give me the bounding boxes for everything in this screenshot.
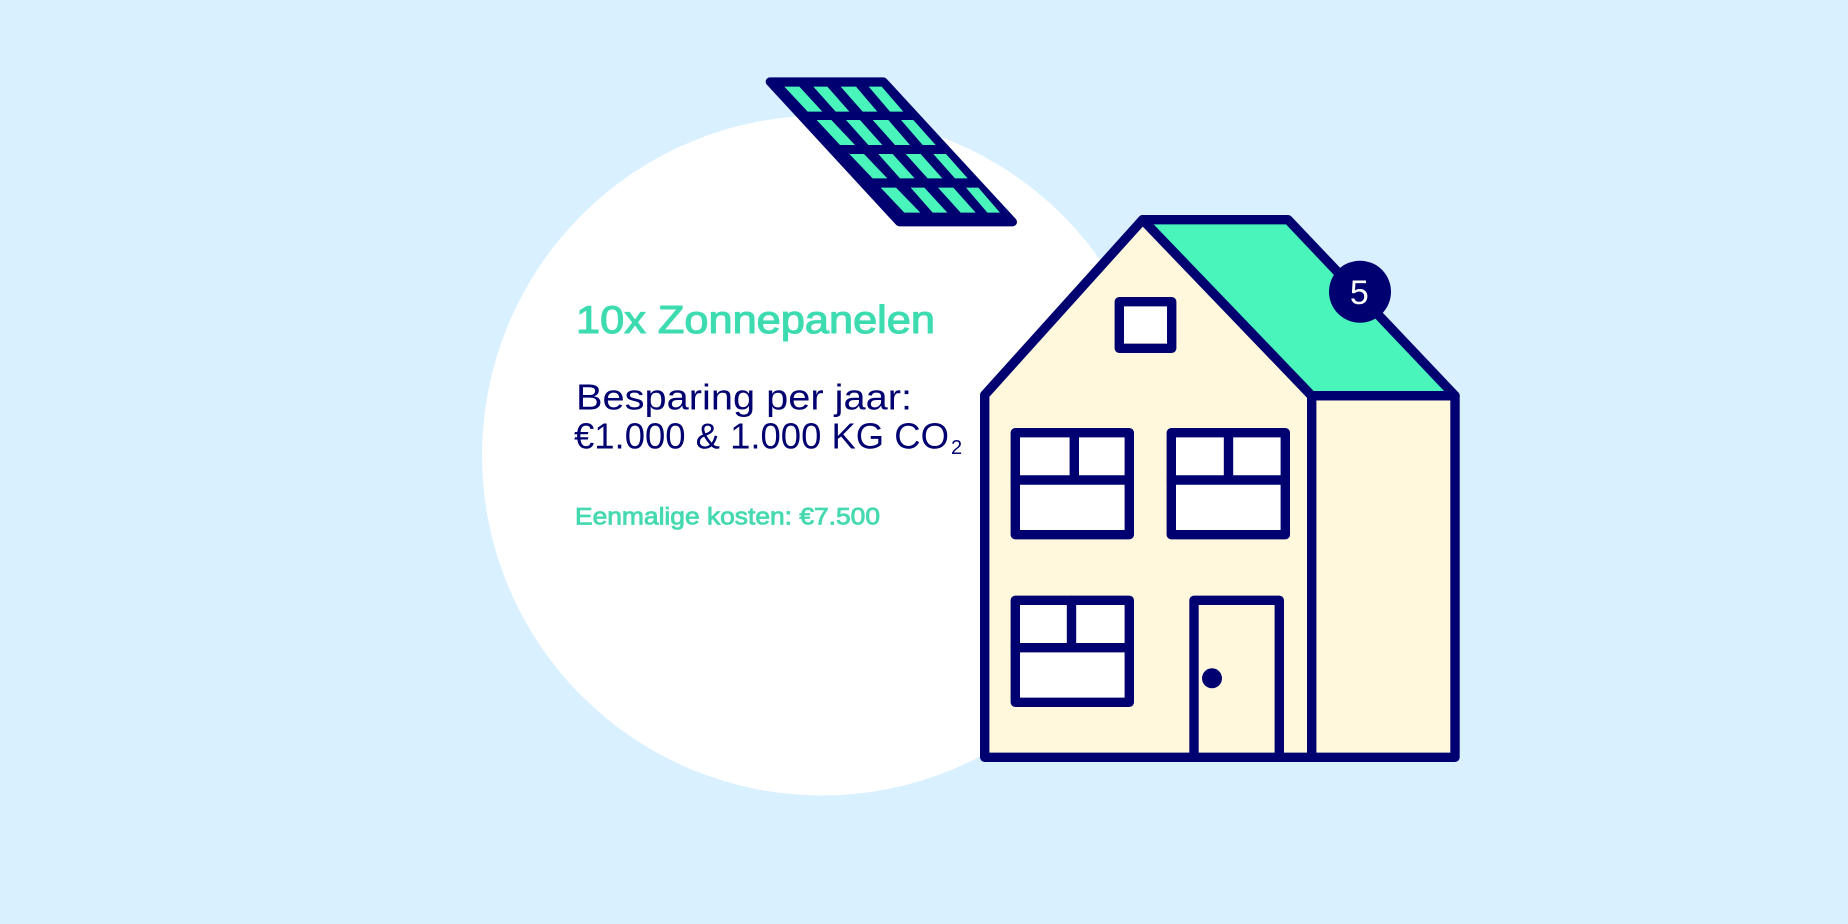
house main wall: [985, 220, 1312, 757]
solar panel frame: [770, 82, 1013, 222]
one-time cost: Eenmalige kosten: €7.500: [575, 503, 880, 530]
roof: [1143, 220, 1455, 396]
savings text: 2: [951, 437, 962, 459]
text block: solar panel details: [574, 299, 962, 530]
background circle: [482, 116, 1162, 796]
number badge: 5: [1350, 274, 1369, 312]
window upper left: [1015, 433, 1129, 535]
door: [1194, 600, 1279, 757]
door knob: [1202, 668, 1222, 688]
solar panel cells: [784, 87, 1000, 213]
savings text: [574, 376, 962, 459]
house annex wall: [1312, 396, 1455, 757]
savings text: Besparing per jaar:: [576, 376, 912, 417]
icon: house: [985, 220, 1455, 757]
icon: solar panel: [770, 82, 1013, 222]
window lower left: [1015, 600, 1129, 702]
savings text: €1.000 & 1.000 KG CO: [574, 415, 949, 456]
heading: 10x Zonnepanelen: [576, 299, 935, 342]
window upper right: [1171, 433, 1285, 535]
attic window: [1119, 302, 1172, 348]
number badge: [1329, 261, 1391, 323]
